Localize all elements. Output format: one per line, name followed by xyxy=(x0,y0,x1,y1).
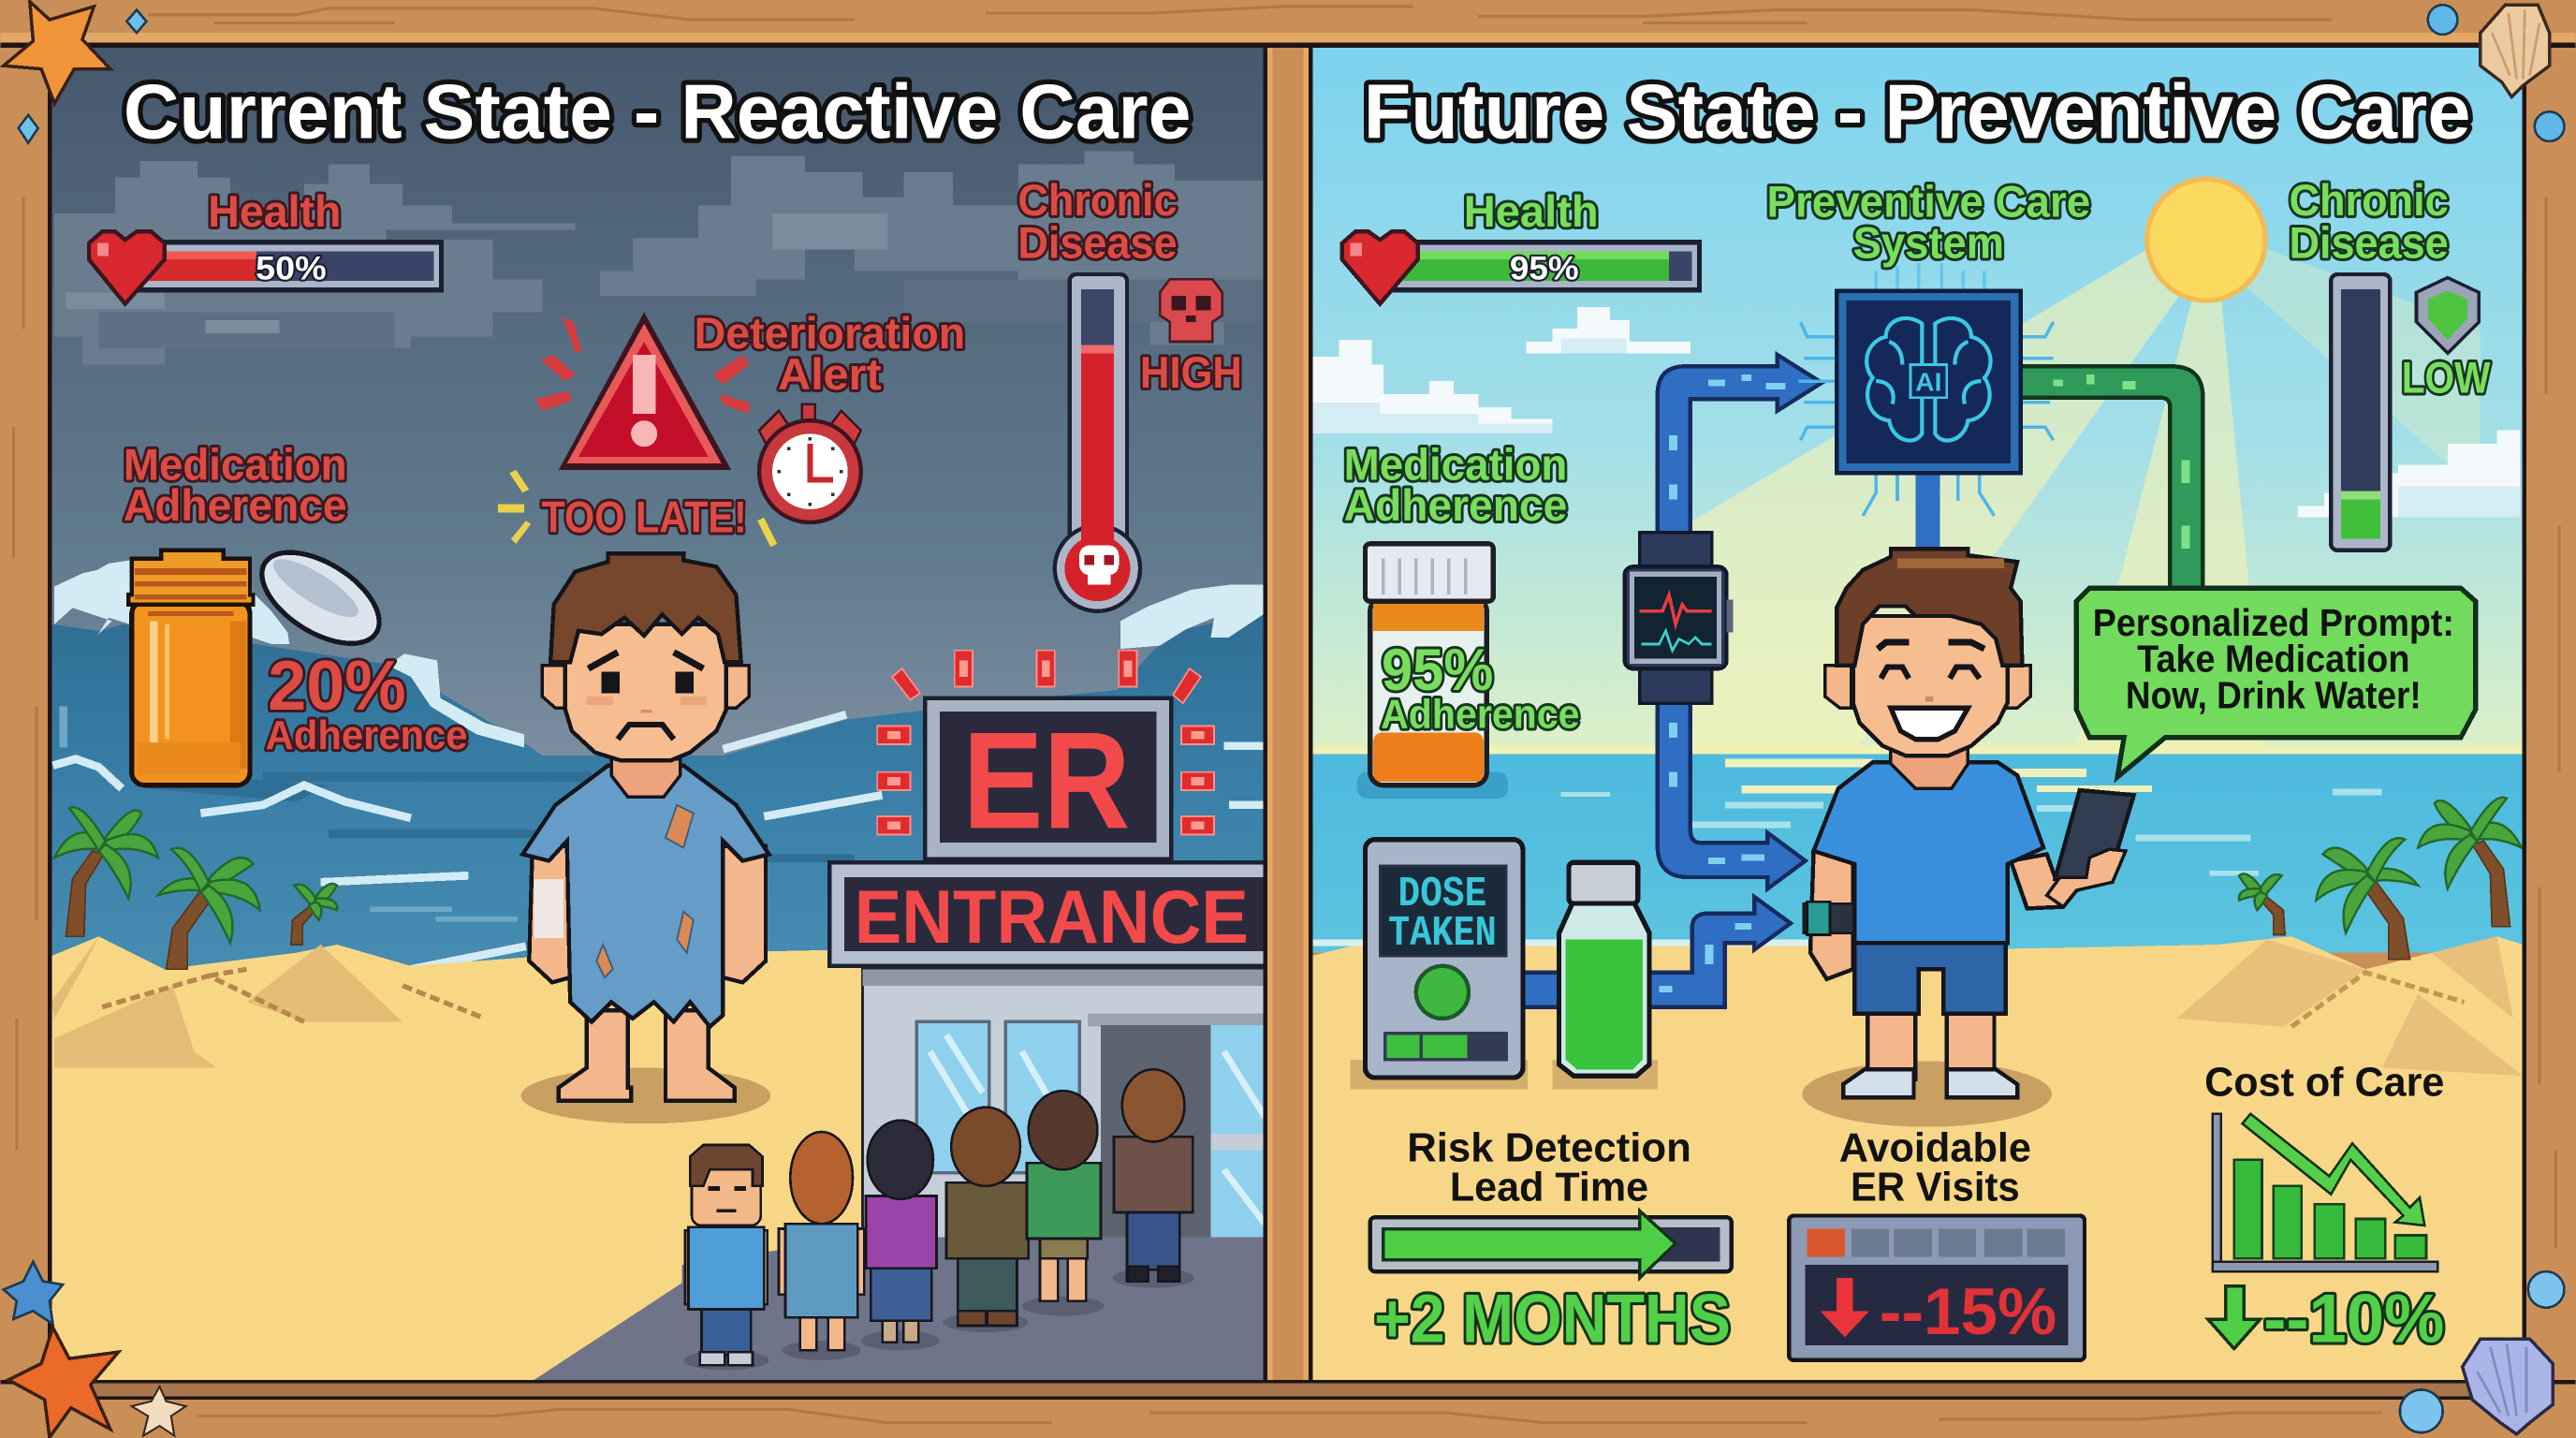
hospital building xyxy=(863,969,1265,1240)
neck xyxy=(1891,747,1968,788)
label: deterioration alert: Deterioration xyxy=(695,309,965,359)
label: deterioration alert xyxy=(695,313,966,393)
legs and feet xyxy=(559,1010,735,1101)
head xyxy=(1853,616,2008,756)
device: dose taken dispenser: DOSE xyxy=(1398,870,1486,918)
shorts xyxy=(1854,940,2006,1014)
gauge: chronic disease low xyxy=(2331,274,2390,550)
label: medication adherence: Medication xyxy=(1344,440,1567,490)
hair xyxy=(1837,549,2022,666)
icon: bottle cap xyxy=(259,550,382,646)
stat: 95 percent adherence: Adherence xyxy=(1381,691,1579,737)
metric: risk detection lead time: Lead Time xyxy=(1450,1165,1648,1211)
sand beach xyxy=(52,936,861,1380)
label: medication adherence xyxy=(1344,440,1567,531)
sad face xyxy=(587,653,707,740)
left arm with wristband xyxy=(1804,851,1856,979)
queue of waiting patients xyxy=(683,1069,1194,1370)
label: preventive care system xyxy=(1767,178,2090,268)
bar chart xyxy=(2213,1114,2437,1271)
metric: avoidable ER visits xyxy=(1789,1125,2085,1360)
blue data arrow: watch to AI system xyxy=(1658,355,1822,542)
panel: future state, preventive care xyxy=(1311,46,2524,1380)
shirt xyxy=(1814,762,2043,943)
icon: alarm stopwatch xyxy=(759,404,861,522)
red warning lights xyxy=(877,651,1214,834)
stat: 20 percent adherence: 20% xyxy=(268,646,406,725)
heading: future state: Future State - Preventive Care xyxy=(1364,68,2470,154)
speech bubble: personalized prompt: Personalized Prompt: xyxy=(2093,601,2454,644)
metric: risk detection lead time: Risk Detection xyxy=(1407,1125,1691,1171)
ground shadow xyxy=(521,1068,770,1123)
hair xyxy=(550,553,741,662)
label: health: Health xyxy=(1464,187,1599,237)
icon: green shield xyxy=(2416,278,2479,353)
gown tears xyxy=(596,805,694,977)
stormy sky xyxy=(51,46,1265,769)
icon: skull xyxy=(1160,279,1222,342)
icon: closed pill bottle xyxy=(1357,544,1508,799)
label: medication adherence: Adherence xyxy=(124,481,347,531)
right arm xyxy=(2011,854,2096,908)
fingers on phone xyxy=(2047,849,2126,907)
decor: bottom right gems xyxy=(2400,1271,2564,1432)
arms xyxy=(529,846,766,982)
calm sea xyxy=(1311,747,2524,953)
ears xyxy=(1825,666,1852,708)
icon: heart xyxy=(1342,231,1418,304)
stat: 20 percent adherence xyxy=(264,657,469,753)
label: medication adherence: Medication xyxy=(124,440,347,490)
decor: top right shell xyxy=(2481,5,2550,97)
stat: 95 percent adherence xyxy=(1381,638,1579,737)
icon: thermometer high xyxy=(1055,274,1140,611)
sand dunes xyxy=(51,936,402,1068)
icon: sun xyxy=(2147,179,2265,301)
character: happy healthy person with phone xyxy=(1802,549,2134,1127)
label: health: Health xyxy=(208,187,341,237)
health bar at 95 percent: 95% xyxy=(1510,250,1579,286)
walkway xyxy=(534,1237,1265,1380)
decor: top left gems xyxy=(19,10,146,143)
patient 5 xyxy=(1022,1091,1104,1316)
green data pipe: AI system to prompt xyxy=(2021,366,2203,592)
label: deterioration alert: Alert xyxy=(778,350,882,400)
patient 4 xyxy=(944,1108,1029,1332)
label: chronic disease: Disease xyxy=(1017,218,1178,268)
sign: entrance: ENTRANCE xyxy=(855,875,1249,960)
metric: avoidable ER visits: --15% xyxy=(1880,1274,2056,1348)
decor: cream starfish xyxy=(132,1387,186,1436)
speech bubble: personalized prompt: Take Medication xyxy=(2137,638,2409,681)
heading: current state: Current State - Reactive Care xyxy=(124,68,1191,154)
neck xyxy=(611,759,681,797)
character: sad patient in torn gown xyxy=(521,553,770,1123)
label: low: LOW xyxy=(2402,353,2491,403)
device: dose taken dispenser xyxy=(1351,840,1528,1089)
device: dose taken dispenser: TAKEN xyxy=(1388,909,1497,958)
icon: open orange pill bottle xyxy=(128,550,254,785)
sun rays xyxy=(1676,246,2481,772)
cost reduction value xyxy=(2208,1286,2261,1349)
smiling face xyxy=(1878,642,1984,740)
sand dunes xyxy=(2176,936,2524,1076)
sign: ER: ER xyxy=(963,704,1131,858)
dune ridges xyxy=(2291,973,2464,1027)
metric: cost of care: Cost of Care xyxy=(2204,1059,2444,1105)
patient 1 xyxy=(683,1145,769,1370)
label: chronic disease: Chronic xyxy=(1017,176,1178,226)
stat: 95 percent adherence: 95% xyxy=(1382,638,1493,703)
legs and shoes xyxy=(1843,1005,2017,1097)
wave foam xyxy=(54,560,1264,747)
blue data arrow: devices to person xyxy=(1519,897,1791,1007)
icon: smartphone xyxy=(2055,790,2134,879)
label: too late: TOO LATE! xyxy=(541,493,747,543)
circuit traces xyxy=(1799,263,2054,516)
device: green water bottle xyxy=(1553,862,1658,1089)
brain outline xyxy=(1866,318,1991,441)
label: medication adherence xyxy=(122,445,348,524)
decor: top left starfish xyxy=(4,2,110,104)
torn gown xyxy=(522,766,769,1027)
speech bubble: personalized prompt xyxy=(2076,588,2476,777)
clear sky xyxy=(1311,46,2524,769)
stat: 20 percent adherence: Adherence xyxy=(266,712,468,758)
speech bubble: personalized prompt: Now, Drink Water! xyxy=(2126,673,2422,716)
downward trend arrow xyxy=(2242,1114,2424,1225)
ground shadow xyxy=(1802,1062,2052,1127)
label: preventive care system: System xyxy=(1853,218,2004,268)
hair highlight xyxy=(1897,559,2004,568)
sea depth bands xyxy=(148,771,855,862)
metric: risk detection lead time xyxy=(1370,1125,1732,1357)
AI chip with brain xyxy=(1799,263,2054,516)
patient 6 xyxy=(1112,1069,1194,1288)
decor: bottom right shell xyxy=(2463,1339,2553,1434)
white clouds xyxy=(1312,307,2520,518)
metric: risk detection lead time: +2 MONTHS xyxy=(1374,1280,1731,1357)
icon: smartwatch xyxy=(1625,533,1734,703)
patient 2 xyxy=(779,1132,864,1360)
label: chronic disease xyxy=(1017,180,1179,261)
health bar at 50 percent: 50% xyxy=(256,250,327,286)
decor: top right gems xyxy=(2428,5,2564,141)
label: chronic disease: Chronic xyxy=(2290,176,2449,226)
decor: bottom left starfish xyxy=(8,1328,119,1437)
label: preventive care system: Preventive Care xyxy=(1767,178,2090,227)
stormy sea with waves xyxy=(51,611,1265,986)
icon: deterioration alert triangle xyxy=(535,312,749,470)
label: chronic disease xyxy=(2290,176,2449,268)
decor: blue starfish xyxy=(4,1262,63,1324)
sand beach xyxy=(1311,936,2524,1380)
dune ridges xyxy=(102,969,485,1021)
metric: avoidable ER visits: ER Visits xyxy=(1851,1165,2020,1211)
label: chronic disease: Disease xyxy=(2290,218,2449,268)
palm trees xyxy=(2239,798,2522,960)
health bar at 95 percent xyxy=(1390,240,1702,292)
patient 3 xyxy=(861,1121,940,1350)
blue data arrow: watch to person xyxy=(1658,690,1806,888)
palm trees xyxy=(54,807,337,969)
head xyxy=(565,624,726,760)
yellow urgency sparks xyxy=(498,470,777,547)
metric: cost of care xyxy=(2204,1059,2444,1357)
panel: current state, reactive care xyxy=(51,46,1273,1380)
label: medication adherence: Adherence xyxy=(1344,481,1567,531)
sea light reflections xyxy=(1725,759,2152,794)
metric: avoidable ER visits: Avoidable xyxy=(1839,1125,2031,1171)
storm clouds xyxy=(54,151,1265,365)
health bar at 50 percent xyxy=(135,240,444,292)
blue data arrow: chip feed to head xyxy=(1915,473,1940,552)
label: high: HIGH xyxy=(1140,348,1242,398)
icon: heart xyxy=(89,231,165,304)
metric: cost of care: --10% xyxy=(2263,1280,2444,1357)
ears xyxy=(542,666,567,708)
AI chip with brain: AI xyxy=(1915,368,1941,397)
